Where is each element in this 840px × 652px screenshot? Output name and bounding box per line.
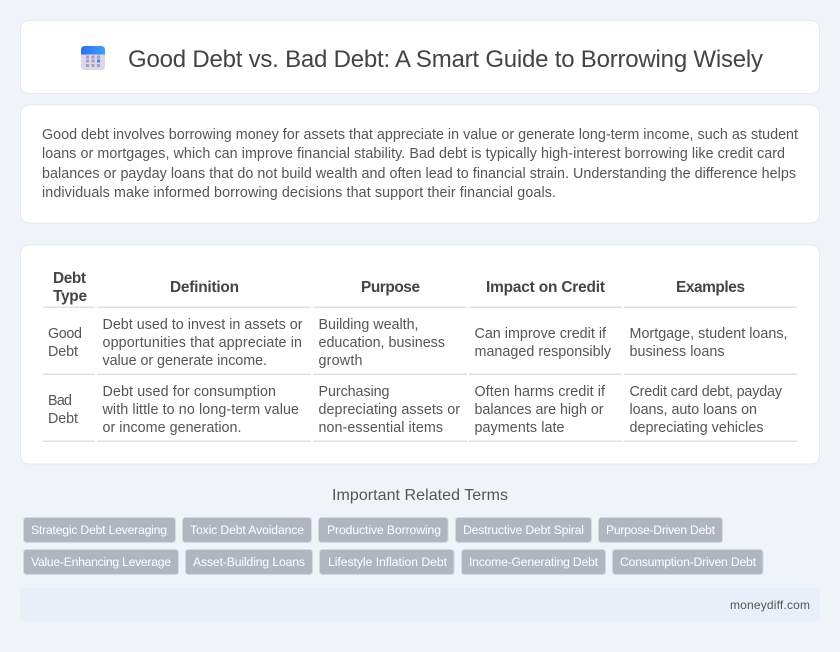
table row: bad debt: with little to no long-term value bbox=[102, 402, 299, 418]
table row: bad debt: Bad bbox=[48, 393, 72, 409]
table header row: Examples bbox=[676, 279, 745, 296]
panel: introduction paragraph: loans or mortgages, which can improve financial stability. Bad debt is typically high-interest borrowing like credit card bbox=[42, 146, 785, 162]
table row: good debt: opportunities that appreciate in bbox=[102, 335, 302, 351]
icon: calendar bbox=[81, 46, 105, 70]
table row: bad debt: depreciating assets or bbox=[318, 402, 460, 418]
table row: good debt: education, business bbox=[318, 335, 445, 351]
table header row: Impact on Credit bbox=[486, 279, 605, 296]
table row: good debt: growth bbox=[318, 353, 363, 369]
related term tags: Lifestyle Inflation Debt bbox=[328, 555, 448, 569]
panel: introduction paragraph bbox=[20, 105, 820, 223]
table header row: Definition bbox=[170, 279, 239, 296]
table row: bad debt bbox=[48, 384, 783, 436]
table row: bad debt: Purchasing bbox=[318, 384, 390, 400]
table row: good debt: Building wealth, bbox=[318, 317, 418, 333]
footer: moneydiff.com bbox=[730, 598, 810, 612]
related term tags: Strategic Debt Leveraging bbox=[31, 523, 167, 537]
table header row: Type bbox=[53, 288, 87, 305]
table header row bbox=[53, 270, 745, 305]
footer bbox=[20, 588, 820, 622]
table row: bad debt: Debt used for consumption bbox=[102, 384, 276, 400]
table row: good debt: Debt bbox=[48, 344, 78, 360]
title: Good Debt vs. Bad Debt: A Smart Guide to Borrowing Wisely bbox=[128, 46, 763, 73]
related term tags: Productive Borrowing bbox=[327, 523, 441, 537]
header panel bbox=[20, 20, 820, 94]
table header row: Debt bbox=[53, 270, 86, 287]
related term tags: Destructive Debt Spiral bbox=[463, 523, 584, 537]
table row: bad debt: Often harms credit if bbox=[474, 384, 605, 400]
related term tags: Toxic Debt Avoidance bbox=[190, 523, 304, 537]
table row: good debt bbox=[48, 317, 788, 369]
related term tags bbox=[24, 518, 763, 574]
table row: bad debt: depreciating vehicles bbox=[630, 420, 764, 436]
panel: introduction paragraph: Good debt involves borrowing money for assets that appreciate in value or generate long-term income, such as student bbox=[42, 127, 798, 143]
table row: good debt: Mortgage, student loans, bbox=[630, 326, 788, 342]
related term tags: Asset-Building Loans bbox=[193, 555, 305, 569]
table row: bad debt: payments late bbox=[474, 420, 565, 436]
table row: good debt: Can improve credit if bbox=[474, 326, 606, 342]
table row: bad debt: Credit card debt, payday bbox=[630, 384, 783, 400]
table row: good debt: Debt used to invest in assets or bbox=[102, 317, 303, 333]
table row: good debt: Good bbox=[48, 326, 82, 342]
table row: bad debt: Debt bbox=[48, 411, 78, 427]
panel: introduction paragraph: individuals make informed borrowing decisions that support their financial goals. bbox=[42, 185, 556, 201]
related term tags: Value-Enhancing Leverage bbox=[31, 555, 171, 569]
table row: bad debt: non-essential items bbox=[318, 420, 443, 436]
table row: bad debt: balances are high or bbox=[474, 402, 604, 418]
table row: bad debt: or income generation. bbox=[102, 420, 242, 436]
table row: good debt: value or generate income. bbox=[102, 353, 267, 369]
related term tags: Purpose-Driven Debt bbox=[606, 523, 716, 537]
table header row: Purpose bbox=[361, 279, 420, 296]
heading: important related terms: Important Related Terms bbox=[332, 487, 508, 504]
table row: good debt: managed responsibly bbox=[474, 344, 612, 360]
related term tags: Income-Generating Debt bbox=[469, 555, 599, 569]
panel: comparison table bbox=[20, 245, 820, 464]
panel: introduction paragraph: balances or payday loans that do not build wealth and often lead to financial strain. Understanding the difference helps bbox=[42, 166, 796, 182]
related term tags: Consumption-Driven Debt bbox=[620, 555, 757, 569]
table row: bad debt: loans, auto loans on bbox=[630, 402, 757, 418]
table row: good debt: business loans bbox=[630, 344, 724, 360]
